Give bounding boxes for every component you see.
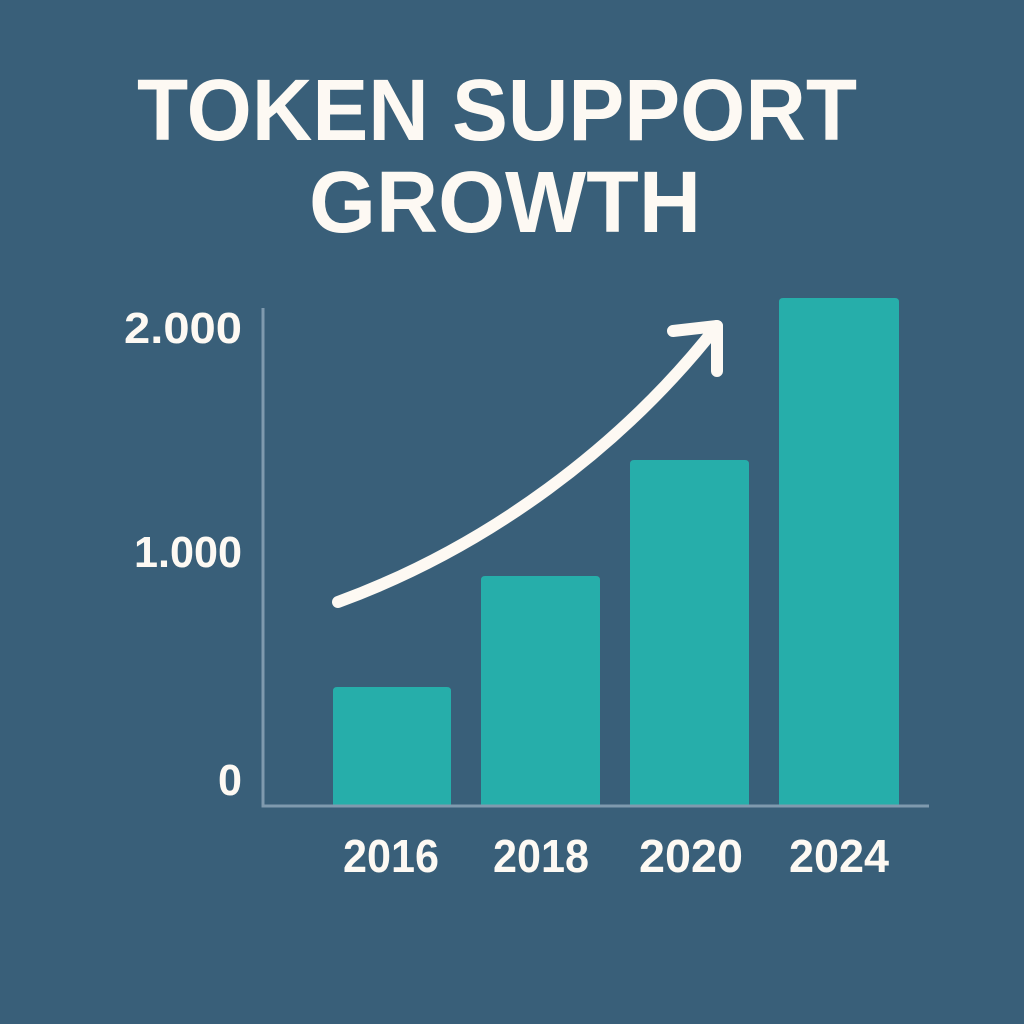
bar 2018 [481,576,600,804]
x axis labels [343,830,889,882]
bar 2024 [779,298,899,804]
x axis labels: 2016 [343,830,439,882]
x axis labels: 2020 [639,830,743,882]
y axis labels: 2.000 [124,304,242,353]
x axis labels: 2018 [493,830,589,882]
y axis labels [124,304,242,805]
y axis labels: 0 [218,756,242,805]
x axis labels: 2024 [789,830,889,882]
bar 2016 [333,687,451,804]
growth arrow [338,326,717,602]
title [137,62,857,251]
bar chart [333,298,899,804]
y axis labels: 1.000 [134,528,242,577]
title: GROWTH [309,154,701,251]
bar 2020 [630,460,749,804]
chart axes [263,308,929,806]
title: TOKEN SUPPORT [137,62,857,159]
